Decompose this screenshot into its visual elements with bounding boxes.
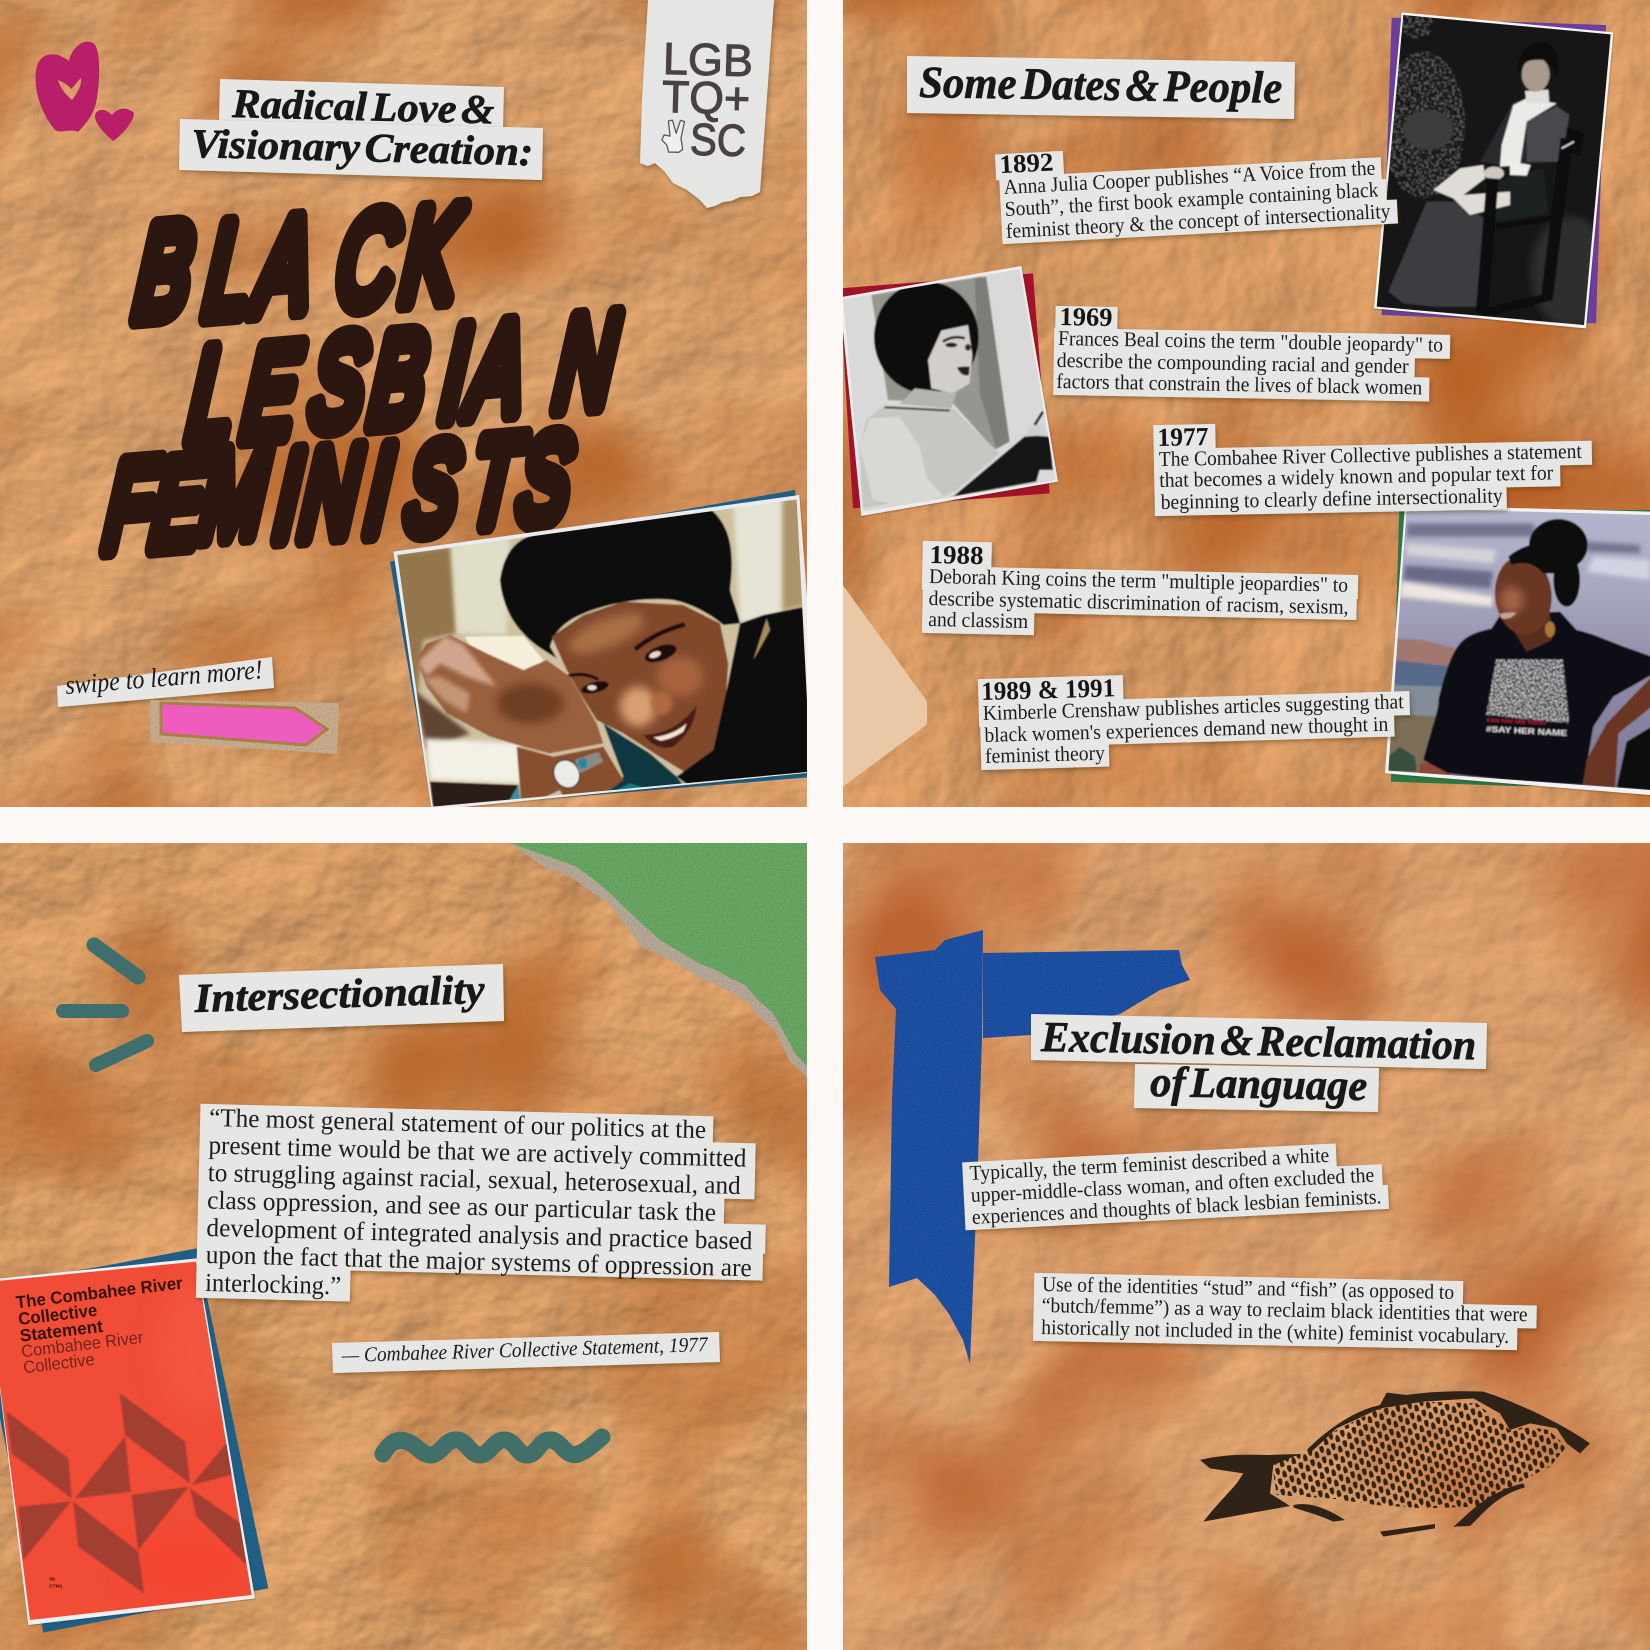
- quote attribution: — Combahee River Collective Statement, 1977: [341, 1332, 709, 1367]
- text block: 1977: 1977: [1157, 422, 1209, 452]
- torn green paper corner: [510, 843, 807, 1078]
- LGBTQ+SC wordmark: [661, 42, 751, 157]
- text block: 1989 and 1991: feminist theory: [985, 741, 1106, 768]
- quote block: “The most general statement of our politics at the: [209, 1103, 706, 1144]
- text block: 1969: Frances Beal coins the term "double jeopardy" to: [1058, 326, 1443, 357]
- panel: title page: [0, 0, 820, 810]
- text block: 1988: describe systematic discrimination of racism, sexism,: [928, 586, 1349, 619]
- text block: 1989 and 1991: [978, 665, 1411, 770]
- panel: some dates and people: [838, 0, 1650, 807]
- text block: 1977: that becomes a widely known and popular text for: [1159, 460, 1553, 492]
- text block: 1977: beginning to clearly define intersectionality: [1160, 483, 1503, 514]
- photo: portrait with blue backing: [390, 490, 820, 810]
- photo: Combahee River Collective book: [0, 1248, 268, 1633]
- photo: Kimberle Crenshaw with green backing: CAN YOU SEE THEM?: [1487, 718, 1547, 727]
- quote block: upon the fact that the major systems of oppression are: [206, 1240, 752, 1282]
- heading: radical love strips: [179, 79, 543, 180]
- text block: 1892: Anna Julia Cooper publishes “A Voice from the: [1003, 156, 1376, 199]
- photo: Combahee River Collective book: Collective: [22, 1349, 96, 1377]
- title: Black Lesbian Feminists: FEMINISTS: [95, 408, 582, 576]
- photo: Combahee River Collective book: Collective: [17, 1300, 99, 1329]
- photo: Anna Julia Cooper with purple backing: [1370, 5, 1620, 335]
- photo: Kimberle Crenshaw with green backing: [1380, 500, 1650, 800]
- icon: pink hearts: [36, 42, 134, 141]
- photo: Combahee River Collective book: Combahee River: [20, 1327, 144, 1361]
- heading: intersectionality: Intersectionality: [193, 966, 486, 1021]
- paper background: [843, 0, 1650, 807]
- text block: 1988: Deborah King coins the term "multiple jeopardies" to: [929, 564, 1348, 597]
- quote block: interlocking.”: [205, 1268, 341, 1300]
- text block: term feminist: experiences and thoughts of black lesbian feminists.: [971, 1184, 1382, 1229]
- quote block: [196, 1103, 768, 1312]
- text block: 1969: describe the compounding racial and gender: [1057, 348, 1409, 378]
- LGBTQ+SC wordmark: SC: [689, 114, 747, 166]
- icon: teal burst marks: [63, 945, 147, 1065]
- text block: 1989 and 1991: Kimberle Crenshaw publishes articles suggesting that: [982, 689, 1404, 725]
- text block: 1892: South”, the first book example containing black: [1004, 177, 1379, 221]
- icon: teal squiggle: [383, 1437, 602, 1455]
- tape: blue painters tape: [875, 930, 1190, 1364]
- icon: pink arrow on tape: [150, 700, 339, 754]
- icon: peace hand: [662, 120, 684, 152]
- text block: 1892: 1892: [999, 147, 1054, 179]
- text block: stud and fish: historically not included in the (white) feminist vocabulary.: [1041, 1315, 1509, 1348]
- paper background: [0, 843, 807, 1650]
- text block: 1988: 1988: [929, 540, 984, 570]
- paper background: [0, 0, 807, 807]
- decorative peach pad: [838, 587, 922, 784]
- text block: 1989 and 1991: black women's experiences demand new thought in: [984, 712, 1389, 747]
- heading: exclusion and reclamation of language: Exclusion & Reclamation: [1040, 1014, 1477, 1069]
- heading: radical love strips: Visionary Creation:: [191, 120, 534, 174]
- photo: Combahee River Collective book: The Combahee River: [15, 1273, 184, 1312]
- text block: stud and fish: “butch/femme”) as a way to reclaim black identities that were: [1042, 1293, 1528, 1326]
- heading: intersectionality: [179, 964, 504, 1032]
- heading: radical love strips: Radical Love &: [231, 80, 495, 132]
- quote block: present time would be that we are actively committed: [208, 1130, 747, 1173]
- LGBTQ+SC wordmark: TQ+: [661, 71, 751, 124]
- paper background: [843, 843, 1650, 1650]
- title: Black Lesbian Feminists: BLACK: [125, 180, 474, 348]
- text block: term feminist: upper-middle-class woman, and often excluded the: [970, 1163, 1375, 1207]
- text block: 1977: [1153, 415, 1593, 516]
- text block: 1892: [995, 130, 1398, 244]
- photo: Combahee River Collective book: Statement: [19, 1316, 104, 1346]
- text block: 1977: The Combahee River Collective publishes a statement: [1159, 439, 1582, 471]
- heading: some dates and people: Some Dates & People: [919, 57, 1283, 113]
- quote block: to struggling against racial, sexual, heterosexual, and: [208, 1158, 741, 1200]
- quote block: class oppression, and see as our particular task the: [207, 1185, 716, 1227]
- text block: 1969: factors that constrain the lives of black women: [1056, 369, 1423, 399]
- LGBTQ+SC wordmark: LGB: [662, 33, 754, 86]
- text block: 1989 and 1991: 1989 & 1991: [981, 673, 1116, 706]
- photo: Combahee River Collective book: C7M1: [49, 1583, 63, 1589]
- panel: intersectionality: [0, 843, 807, 1650]
- photo: Frances Beal with red backing: [840, 260, 1063, 520]
- photo: Combahee River Collective book: 09: [49, 1577, 55, 1583]
- text block: stud and fish: [1033, 1272, 1537, 1350]
- text block: term feminist: [962, 1140, 1389, 1230]
- panel: exclusion and reclamation: [843, 843, 1650, 1650]
- title: Black Lesbian Feminists: LESBIAN: [178, 286, 628, 469]
- text block: 1969: [1053, 302, 1451, 402]
- heading: exclusion and reclamation of language: [1031, 1014, 1487, 1112]
- text block: 1988: and classism: [928, 607, 1028, 633]
- photo: Kimberle Crenshaw with green backing: #SAY HER NAME: [1486, 724, 1568, 738]
- text block: stud and fish: Use of the identities “stud” and “fish” (as opposed to: [1042, 1272, 1454, 1304]
- tape: LGBTQ+SC label: [640, 0, 774, 208]
- title: Black Lesbian Feminists: [95, 180, 628, 576]
- heading: exclusion and reclamation of language: of Language: [1150, 1059, 1368, 1110]
- text block: 1892: feminist theory & the concept of intersectionality: [1005, 199, 1391, 243]
- callout: swipe to learn more: swipe to learn more!: [64, 654, 264, 700]
- text block: term feminist: Typically, the term feminist described a white: [969, 1143, 1330, 1185]
- illustration: fish: [1200, 1391, 1590, 1537]
- text block: 1969: 1969: [1059, 302, 1113, 332]
- text block: 1988: [921, 540, 1359, 642]
- quote block: development of integrated analysis and practice based: [206, 1213, 753, 1255]
